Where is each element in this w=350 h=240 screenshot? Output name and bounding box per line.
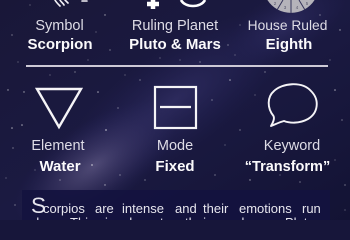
text: description: and [175, 201, 197, 216]
icon: scorpion symbol [55, 0, 87, 6]
icon: speech bubble [269, 84, 317, 126]
text: description: their [203, 201, 229, 216]
icon: house wheel: 4 [296, 5, 299, 10]
label: house ruled: Eighth [266, 36, 312, 53]
label: symbol [27, 18, 93, 53]
label: element: Element [31, 138, 85, 154]
label: ruling planet: Ruling Planet [132, 18, 218, 34]
panel: description [22, 190, 330, 230]
label: mode [155, 138, 195, 175]
text: description: corpios [43, 201, 85, 216]
label: element [31, 138, 85, 175]
icon: house wheel: 3 [284, 5, 287, 10]
label: ruling planet: Pluto & Mars [129, 36, 221, 53]
icon: water triangle [37, 89, 81, 127]
label: symbol: Symbol [35, 18, 84, 34]
text: description: emotions [239, 201, 292, 216]
icon: fixed mode square [155, 87, 196, 128]
icon: house wheel [267, 0, 315, 13]
text: description: run [302, 201, 321, 216]
text: description: S [31, 193, 46, 218]
text: description: intense [122, 201, 164, 216]
label: element: Water [39, 158, 81, 175]
label: keyword: “Transform” [245, 159, 330, 175]
text: description [31, 193, 321, 230]
icon: house wheel: 2 [274, 1, 277, 6]
label: house ruled: House Ruled [248, 18, 327, 33]
label: house ruled [248, 18, 327, 53]
text: description: are [95, 201, 114, 216]
icon: house wheel: 5 [306, 1, 309, 6]
label: keyword: Keyword [264, 138, 320, 154]
label: keyword [245, 138, 330, 175]
label: ruling planet [129, 18, 221, 53]
label: mode: Fixed [155, 158, 195, 175]
label: symbol: Scorpion [27, 36, 93, 53]
icon: ruling planet symbols [147, 0, 205, 9]
label: mode: Mode [157, 138, 193, 154]
